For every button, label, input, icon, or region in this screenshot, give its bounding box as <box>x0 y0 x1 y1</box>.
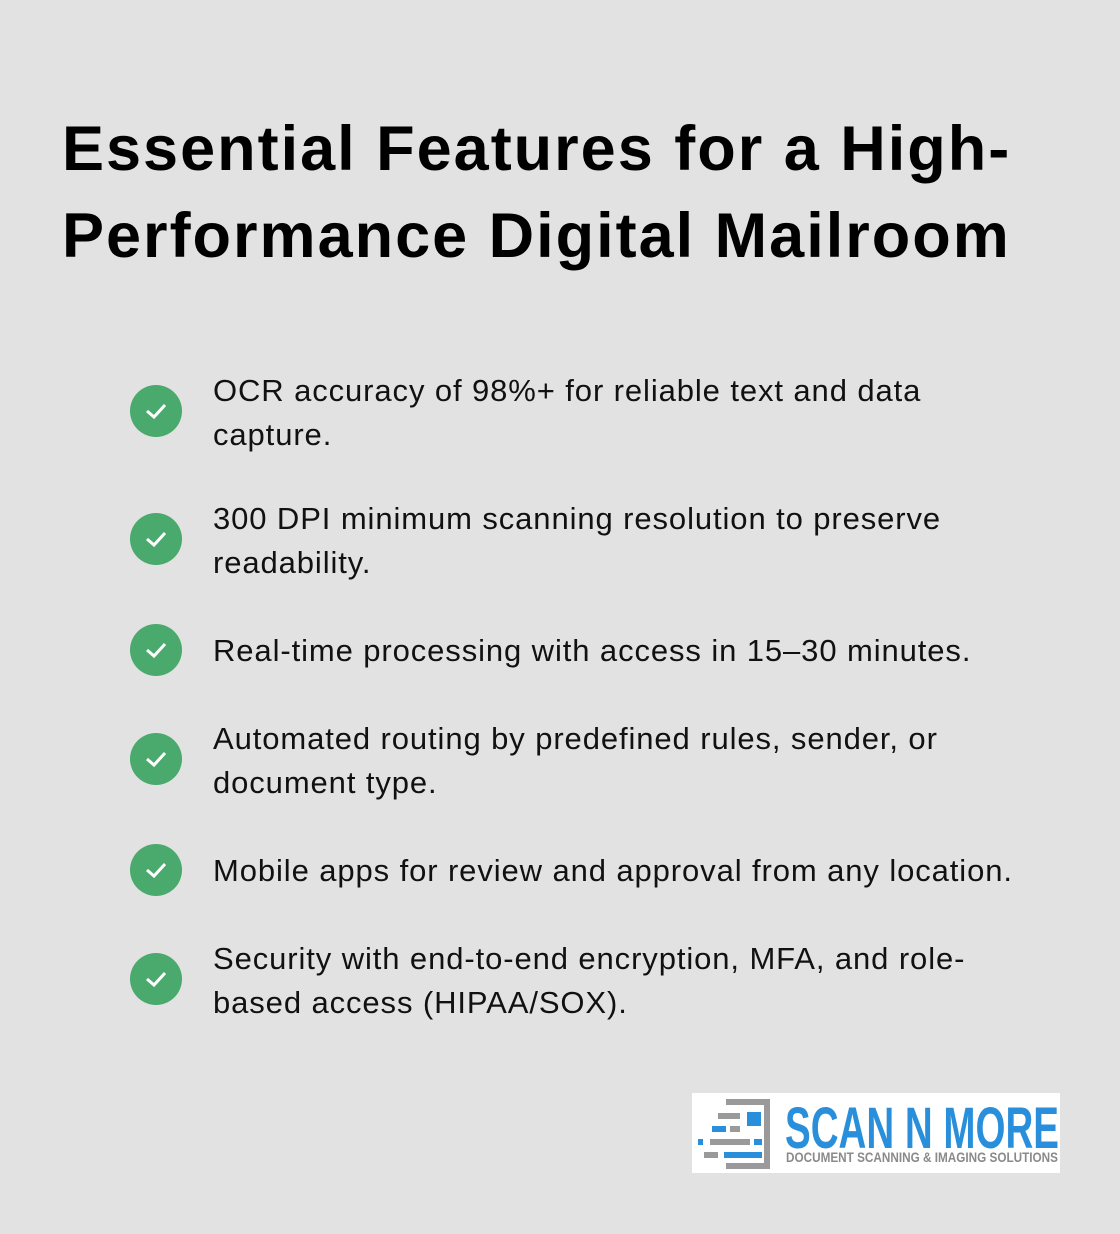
text <box>213 373 921 452</box>
item 4 <box>130 721 938 800</box>
text: readability. <box>213 545 371 580</box>
icon: check <box>130 844 182 896</box>
text <box>213 501 941 580</box>
icon: check <box>130 733 182 785</box>
text <box>213 721 938 800</box>
item 5 <box>130 844 1013 896</box>
item 6 <box>130 941 965 1020</box>
text: OCR accuracy of 98%+ for reliable text and data <box>213 373 921 408</box>
text: Real-time processing with access in 15–30 minutes. <box>213 633 971 668</box>
text: document type. <box>213 765 438 800</box>
title: Performance Digital Mailroom <box>62 201 1011 271</box>
text: Automated routing by predefined rules, sender, or <box>213 721 938 756</box>
text: capture. <box>213 417 332 452</box>
text: Security with end-to-end encryption, MFA, and role- <box>213 941 965 976</box>
item 3 <box>130 624 971 676</box>
item 2 <box>130 501 941 580</box>
text: Mobile apps for review and approval from any location. <box>213 853 1013 888</box>
title: Essential Features for a High- <box>62 114 1011 184</box>
icon: check <box>130 385 182 437</box>
icon: check <box>130 624 182 676</box>
text: 300 DPI minimum scanning resolution to preserve <box>213 501 941 536</box>
logo <box>692 1093 1060 1173</box>
icon: check <box>130 953 182 1005</box>
icon: check <box>130 513 182 565</box>
item 1 <box>130 373 921 452</box>
title <box>62 114 1011 271</box>
text <box>213 941 965 1020</box>
text: based access (HIPAA/SOX). <box>213 985 628 1020</box>
